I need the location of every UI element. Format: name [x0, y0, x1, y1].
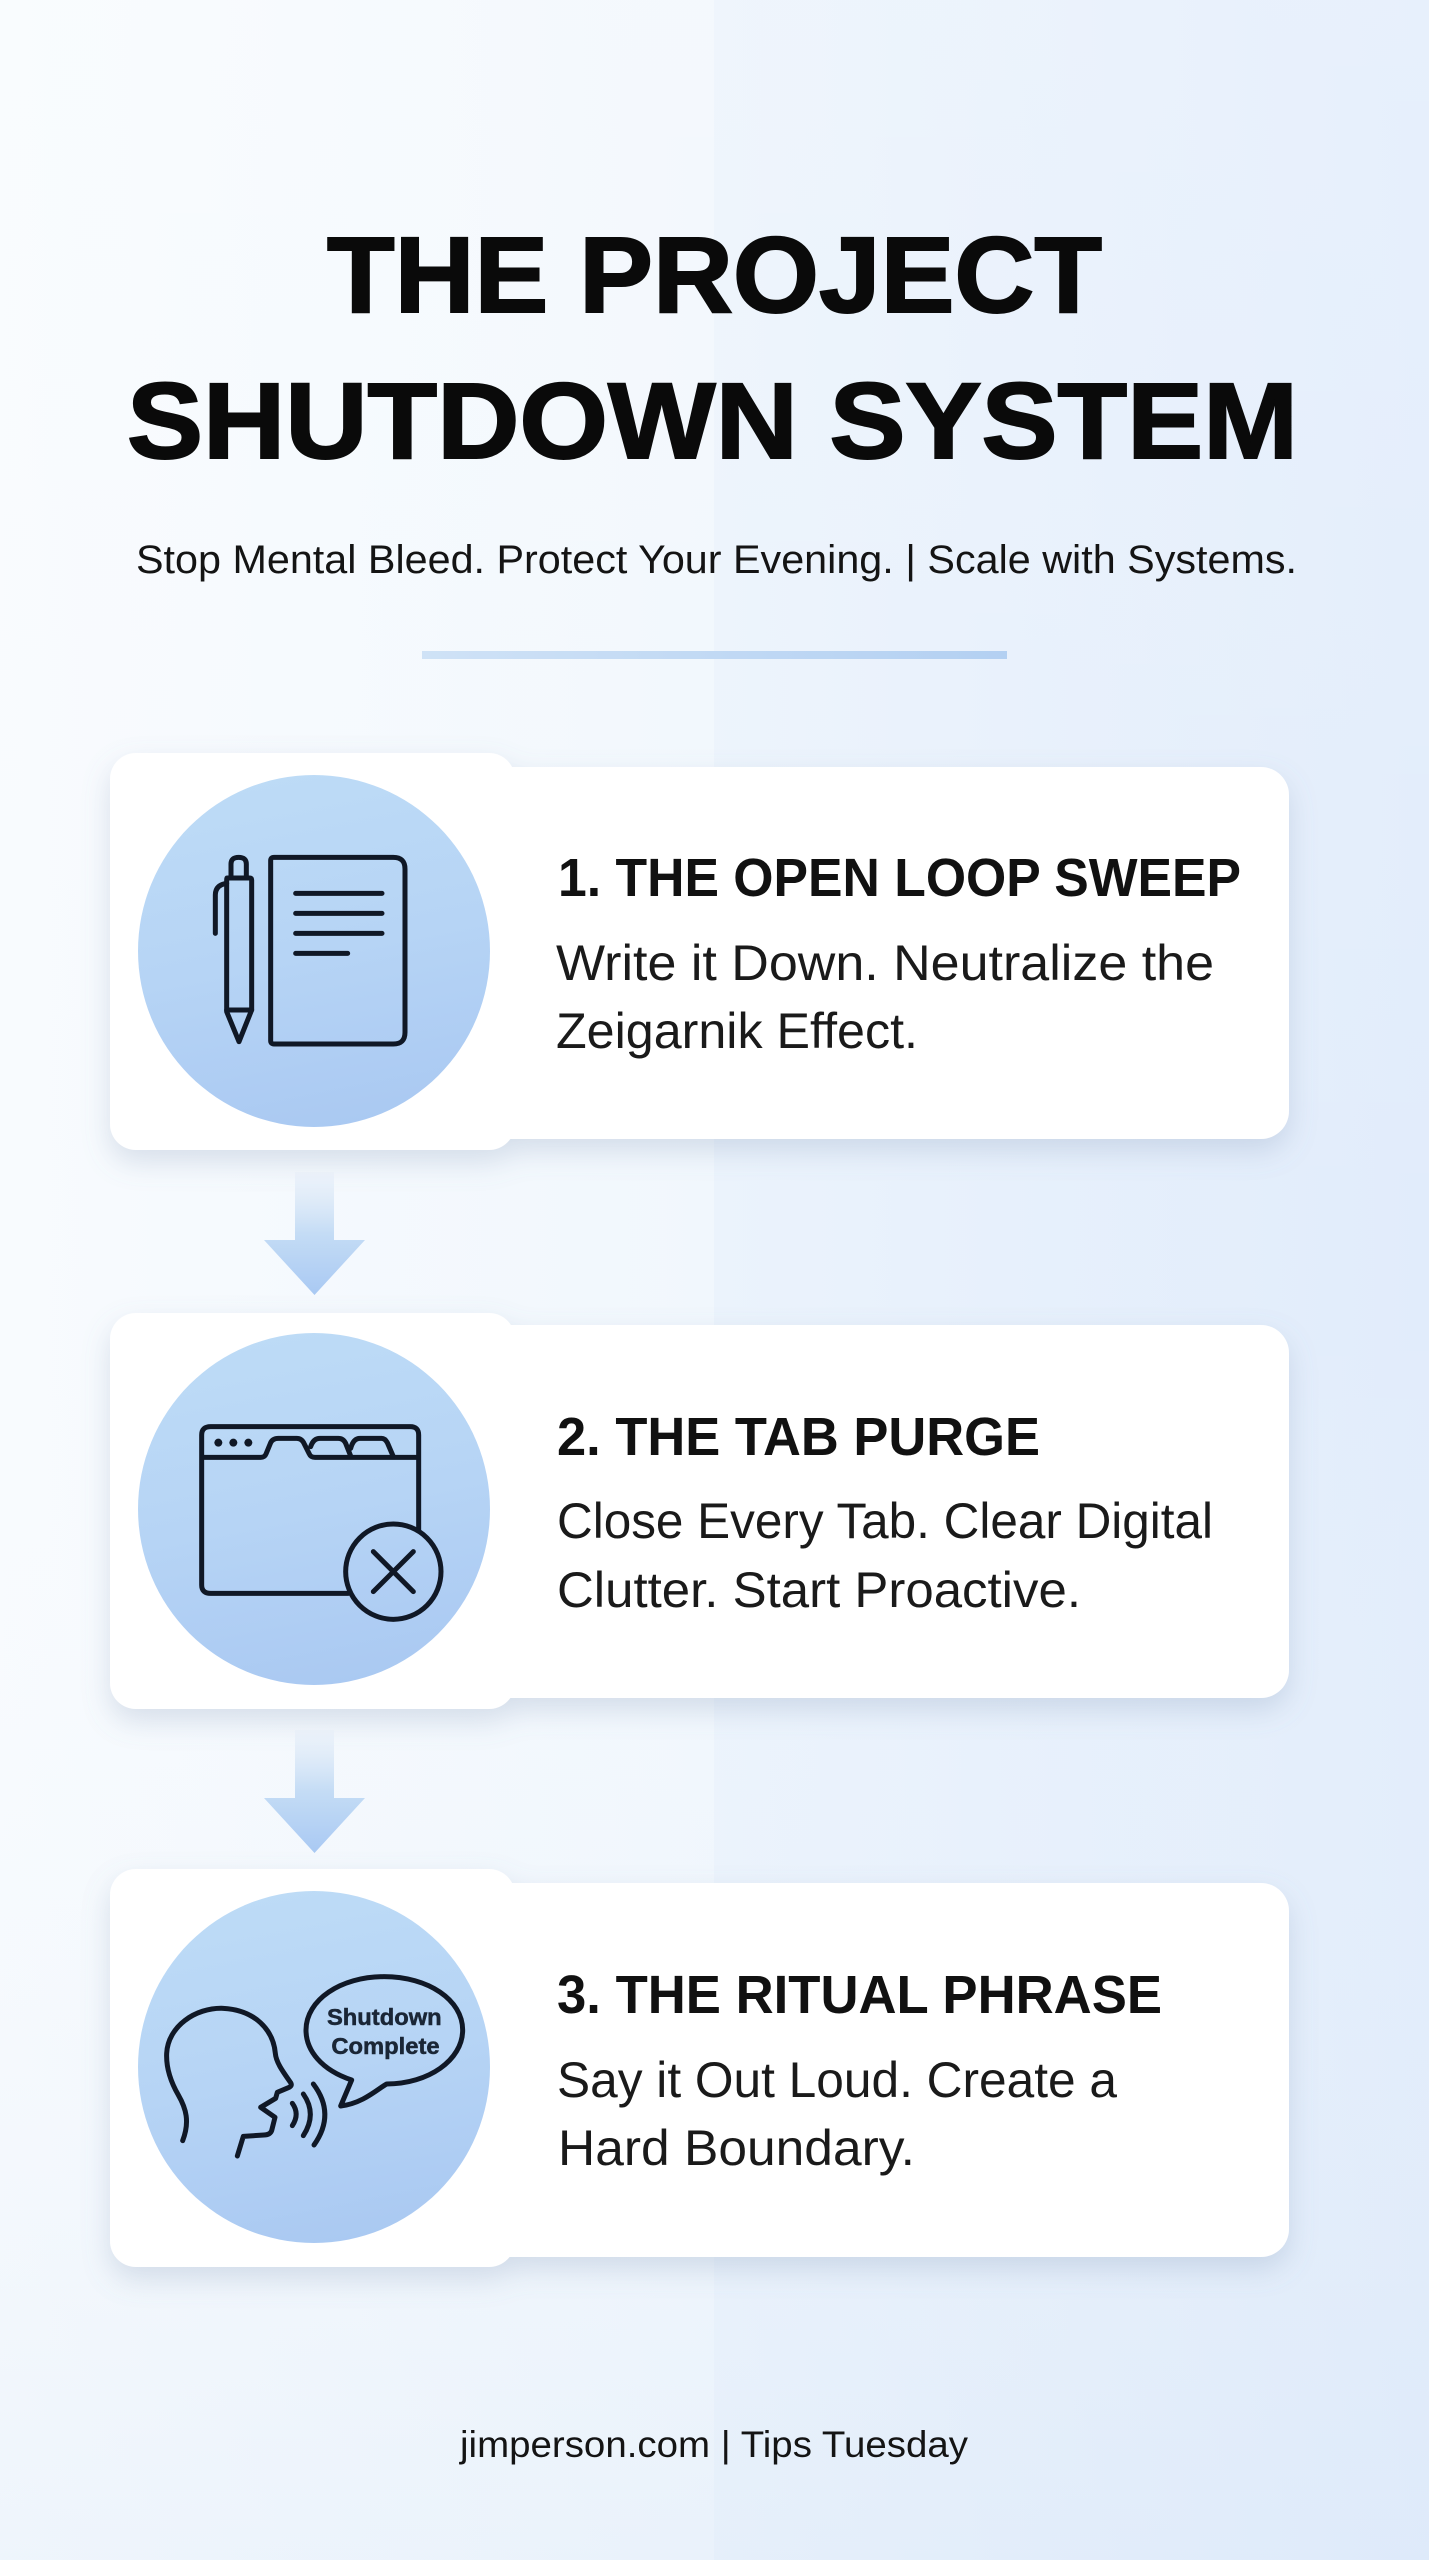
title: THE PROJECT — [327, 214, 1102, 335]
step 2 heading: 2. THE TAB PURGE — [557, 1407, 1040, 1467]
step 2 body: Close Every Tab. Clear Digital — [557, 1493, 1213, 1549]
divider bar — [422, 651, 1007, 659]
icon disc 3 — [138, 1891, 490, 2243]
step 3 body: Hard Boundary. — [558, 2120, 915, 2176]
step 1 body: Write it Down. Neutralize the — [556, 935, 1214, 991]
speech bubble text: Complete — [331, 2033, 440, 2059]
card background 1 — [110, 753, 1289, 1150]
icon: browser window with close button — [202, 1427, 441, 1619]
subtitle: Stop Mental Bleed. Protect Your Evening. | Scale with Systems. — [136, 538, 1297, 582]
step 1 body: Zeigarnik Effect. — [556, 1003, 918, 1059]
icon disc 1 — [138, 775, 490, 1127]
panel: step 3 — [110, 1869, 1289, 2267]
title — [127, 214, 1298, 481]
step 3 body: Say it Out Loud. Create a — [557, 2052, 1117, 2108]
step 3 heading: 3. THE RITUAL PHRASE — [557, 1965, 1162, 2025]
icon: pen and notebook — [215, 857, 405, 1044]
icon: speaking head with speech bubble — [167, 1977, 463, 2156]
speech bubble text — [327, 2004, 442, 2059]
title: SHUTDOWN SYSTEM — [127, 360, 1298, 481]
arrow 1 — [264, 1172, 365, 1295]
panel: step 2 — [110, 1313, 1289, 1709]
speech bubble text: Shutdown — [327, 2004, 442, 2030]
icon disc 2 — [138, 1333, 490, 1685]
card background 2 — [110, 1313, 1289, 1709]
arrow 2 — [264, 1730, 365, 1853]
step 2 body: Clutter. Start Proactive. — [557, 1562, 1081, 1618]
step 2 body — [557, 1493, 1213, 1618]
card background 3 — [110, 1869, 1289, 2267]
step 1 body — [556, 935, 1214, 1059]
footer: jimperson.com | Tips Tuesday — [459, 2424, 969, 2465]
panel: step 1 — [110, 753, 1289, 1150]
step 3 body — [557, 2052, 1117, 2176]
step 1 heading: 1. THE OPEN LOOP SWEEP — [558, 848, 1241, 908]
